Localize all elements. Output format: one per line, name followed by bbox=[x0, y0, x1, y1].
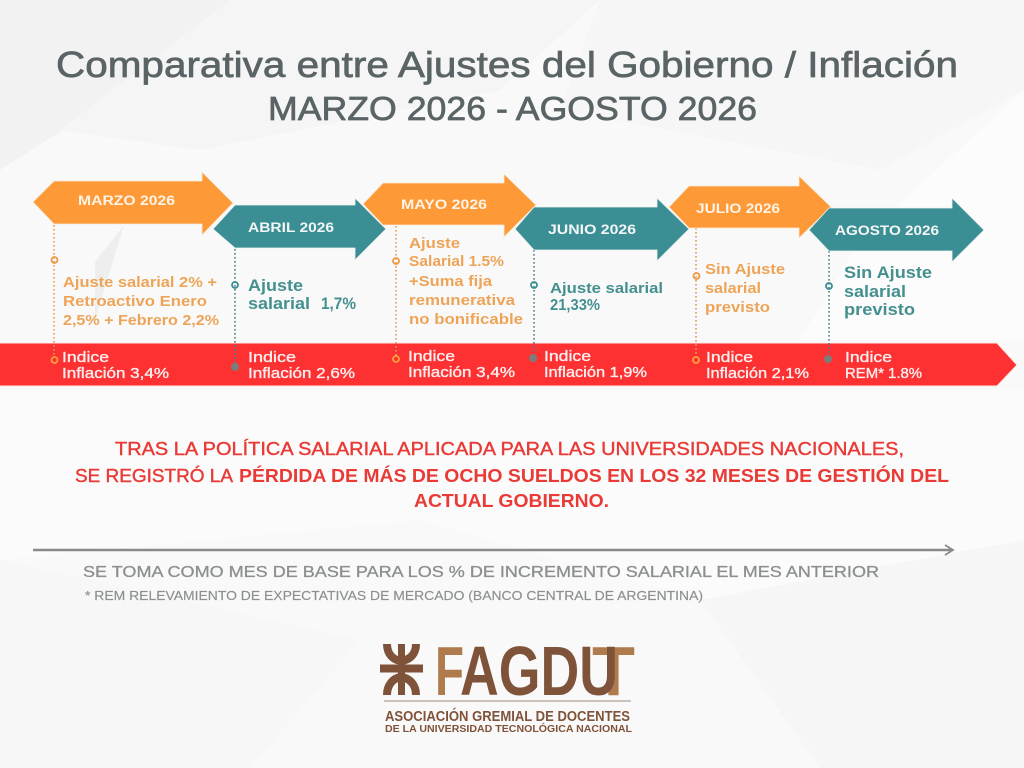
icon: UTN symbol bbox=[380, 644, 423, 695]
footnotes: * REM RELEVAMIENTO DE EXPECTATIVAS DE MERCADO (BANCO CENTRAL DE ARGENTINA) bbox=[85, 589, 703, 603]
connector: marzo bbox=[52, 225, 58, 363]
footnotes bbox=[83, 564, 879, 603]
text: mayo adjustment: +Suma fija bbox=[409, 273, 493, 290]
callout statement: SE REGISTRÓ LA bbox=[75, 465, 233, 486]
arrow: agosto bbox=[809, 198, 984, 262]
text: marzo adjustment: Retroactivo Enero bbox=[63, 293, 207, 310]
text: abril adjustment: Ajuste bbox=[248, 277, 303, 295]
arrow: agosto: AGOSTO 2026 bbox=[835, 223, 940, 238]
callout statement: ACTUAL GOBIERNO. bbox=[414, 491, 609, 511]
inflation labels: Indice bbox=[248, 350, 296, 366]
logo: FAGDUT: T bbox=[592, 632, 635, 710]
text: abril adjustment: 1,7% bbox=[321, 294, 356, 313]
logo: FAGDUT: DE LA UNIVERSIDAD TECNOLÓGICA NACIONAL bbox=[385, 722, 633, 735]
arrow: marzo: MARZO 2026 bbox=[78, 193, 176, 208]
text: mayo adjustment: Ajuste bbox=[409, 235, 460, 252]
connector: junio bbox=[529, 250, 537, 362]
arrow: julio bbox=[669, 176, 831, 238]
inflation labels: Indice bbox=[544, 349, 591, 365]
logo: FAGDUT: AGDU bbox=[460, 632, 618, 710]
text: junio adjustment: 21,33% bbox=[550, 297, 600, 314]
connector: abril bbox=[231, 249, 239, 371]
inflation labels: REM* 1.8% bbox=[845, 366, 922, 382]
text: mayo adjustment bbox=[409, 235, 523, 328]
arrow: marzo bbox=[33, 172, 233, 235]
text: marzo adjustment bbox=[63, 274, 219, 329]
inflation labels: Inflación 2,1% bbox=[706, 366, 809, 382]
connector: julio bbox=[693, 228, 700, 363]
inflation labels: Indice bbox=[706, 350, 753, 366]
text: julio adjustment bbox=[705, 261, 785, 316]
inflation labels: Inflación 1,9% bbox=[544, 365, 647, 381]
connector: mayo bbox=[393, 226, 399, 362]
callout statement: TRAS LA POLÍTICA SALARIAL APLICADA PARA LAS UNIVERSIDADES NACIONALES, bbox=[115, 439, 904, 459]
text: agosto adjustment: previsto bbox=[844, 301, 915, 319]
arrow: mayo bbox=[363, 174, 536, 237]
callout statement bbox=[75, 439, 949, 511]
text: mayo adjustment: Salarial 1.5% bbox=[409, 253, 504, 270]
title bbox=[56, 44, 958, 127]
text: marzo adjustment: 2,5% + Febrero 2,2% bbox=[63, 312, 219, 329]
logo: FAGDUT bbox=[380, 632, 635, 735]
logo: FAGDUT: ASOCIACIÓN GREMIAL DE DOCENTES bbox=[385, 707, 630, 725]
text: abril adjustment bbox=[248, 277, 356, 313]
inflation labels: Inflación 3,4% bbox=[408, 365, 515, 381]
text: mayo adjustment: no bonificable bbox=[409, 311, 523, 328]
text: julio adjustment: previsto bbox=[705, 299, 770, 316]
connector: agosto bbox=[824, 251, 832, 363]
text: agosto adjustment: salarial bbox=[844, 283, 906, 301]
text: junio adjustment: Ajuste salarial bbox=[550, 280, 663, 297]
text: abril adjustment: salarial bbox=[248, 295, 310, 313]
callout statement: PÉRDIDA DE MÁS DE OCHO SUELDOS EN LOS 32 MESES DE GESTIÓN DEL bbox=[239, 465, 949, 486]
red inflation arrow bar bbox=[0, 343, 1017, 386]
divider arrow bbox=[33, 545, 953, 555]
footnotes: SE TOMA COMO MES DE BASE PARA LOS % DE INCREMENTO SALARIAL EL MES ANTERIOR bbox=[83, 564, 879, 581]
inflation labels bbox=[62, 349, 922, 382]
arrow: junio: JUNIO 2026 bbox=[548, 222, 637, 237]
text: mayo adjustment: remunerativa bbox=[409, 292, 516, 309]
arrow: mayo: MAYO 2026 bbox=[401, 197, 488, 212]
logo wordmark: F bbox=[435, 632, 464, 710]
title: MARZO 2026 - AGOSTO 2026 bbox=[268, 90, 757, 127]
title: Comparativa entre Ajustes del Gobierno / Inflación bbox=[56, 44, 958, 85]
text: agosto adjustment bbox=[844, 264, 932, 319]
text: agosto adjustment: Sin Ajuste bbox=[844, 264, 932, 282]
text: julio adjustment: salarial bbox=[705, 280, 761, 297]
arrow: abril bbox=[213, 198, 386, 260]
inflation labels: Indice bbox=[62, 350, 109, 366]
text: junio adjustment bbox=[550, 280, 663, 314]
text: marzo adjustment: Ajuste salarial 2% + bbox=[63, 274, 217, 291]
inflation labels: Indice bbox=[845, 350, 892, 366]
inflation labels: Inflación 2,6% bbox=[248, 366, 355, 382]
arrow: abril: ABRIL 2026 bbox=[248, 220, 335, 235]
arrow: julio: JULIO 2026 bbox=[696, 201, 781, 216]
inflation labels: Inflación 3,4% bbox=[62, 366, 169, 382]
arrow: junio bbox=[515, 198, 689, 261]
inflation labels: Indice bbox=[408, 349, 455, 365]
text: julio adjustment: Sin Ajuste bbox=[705, 261, 785, 278]
